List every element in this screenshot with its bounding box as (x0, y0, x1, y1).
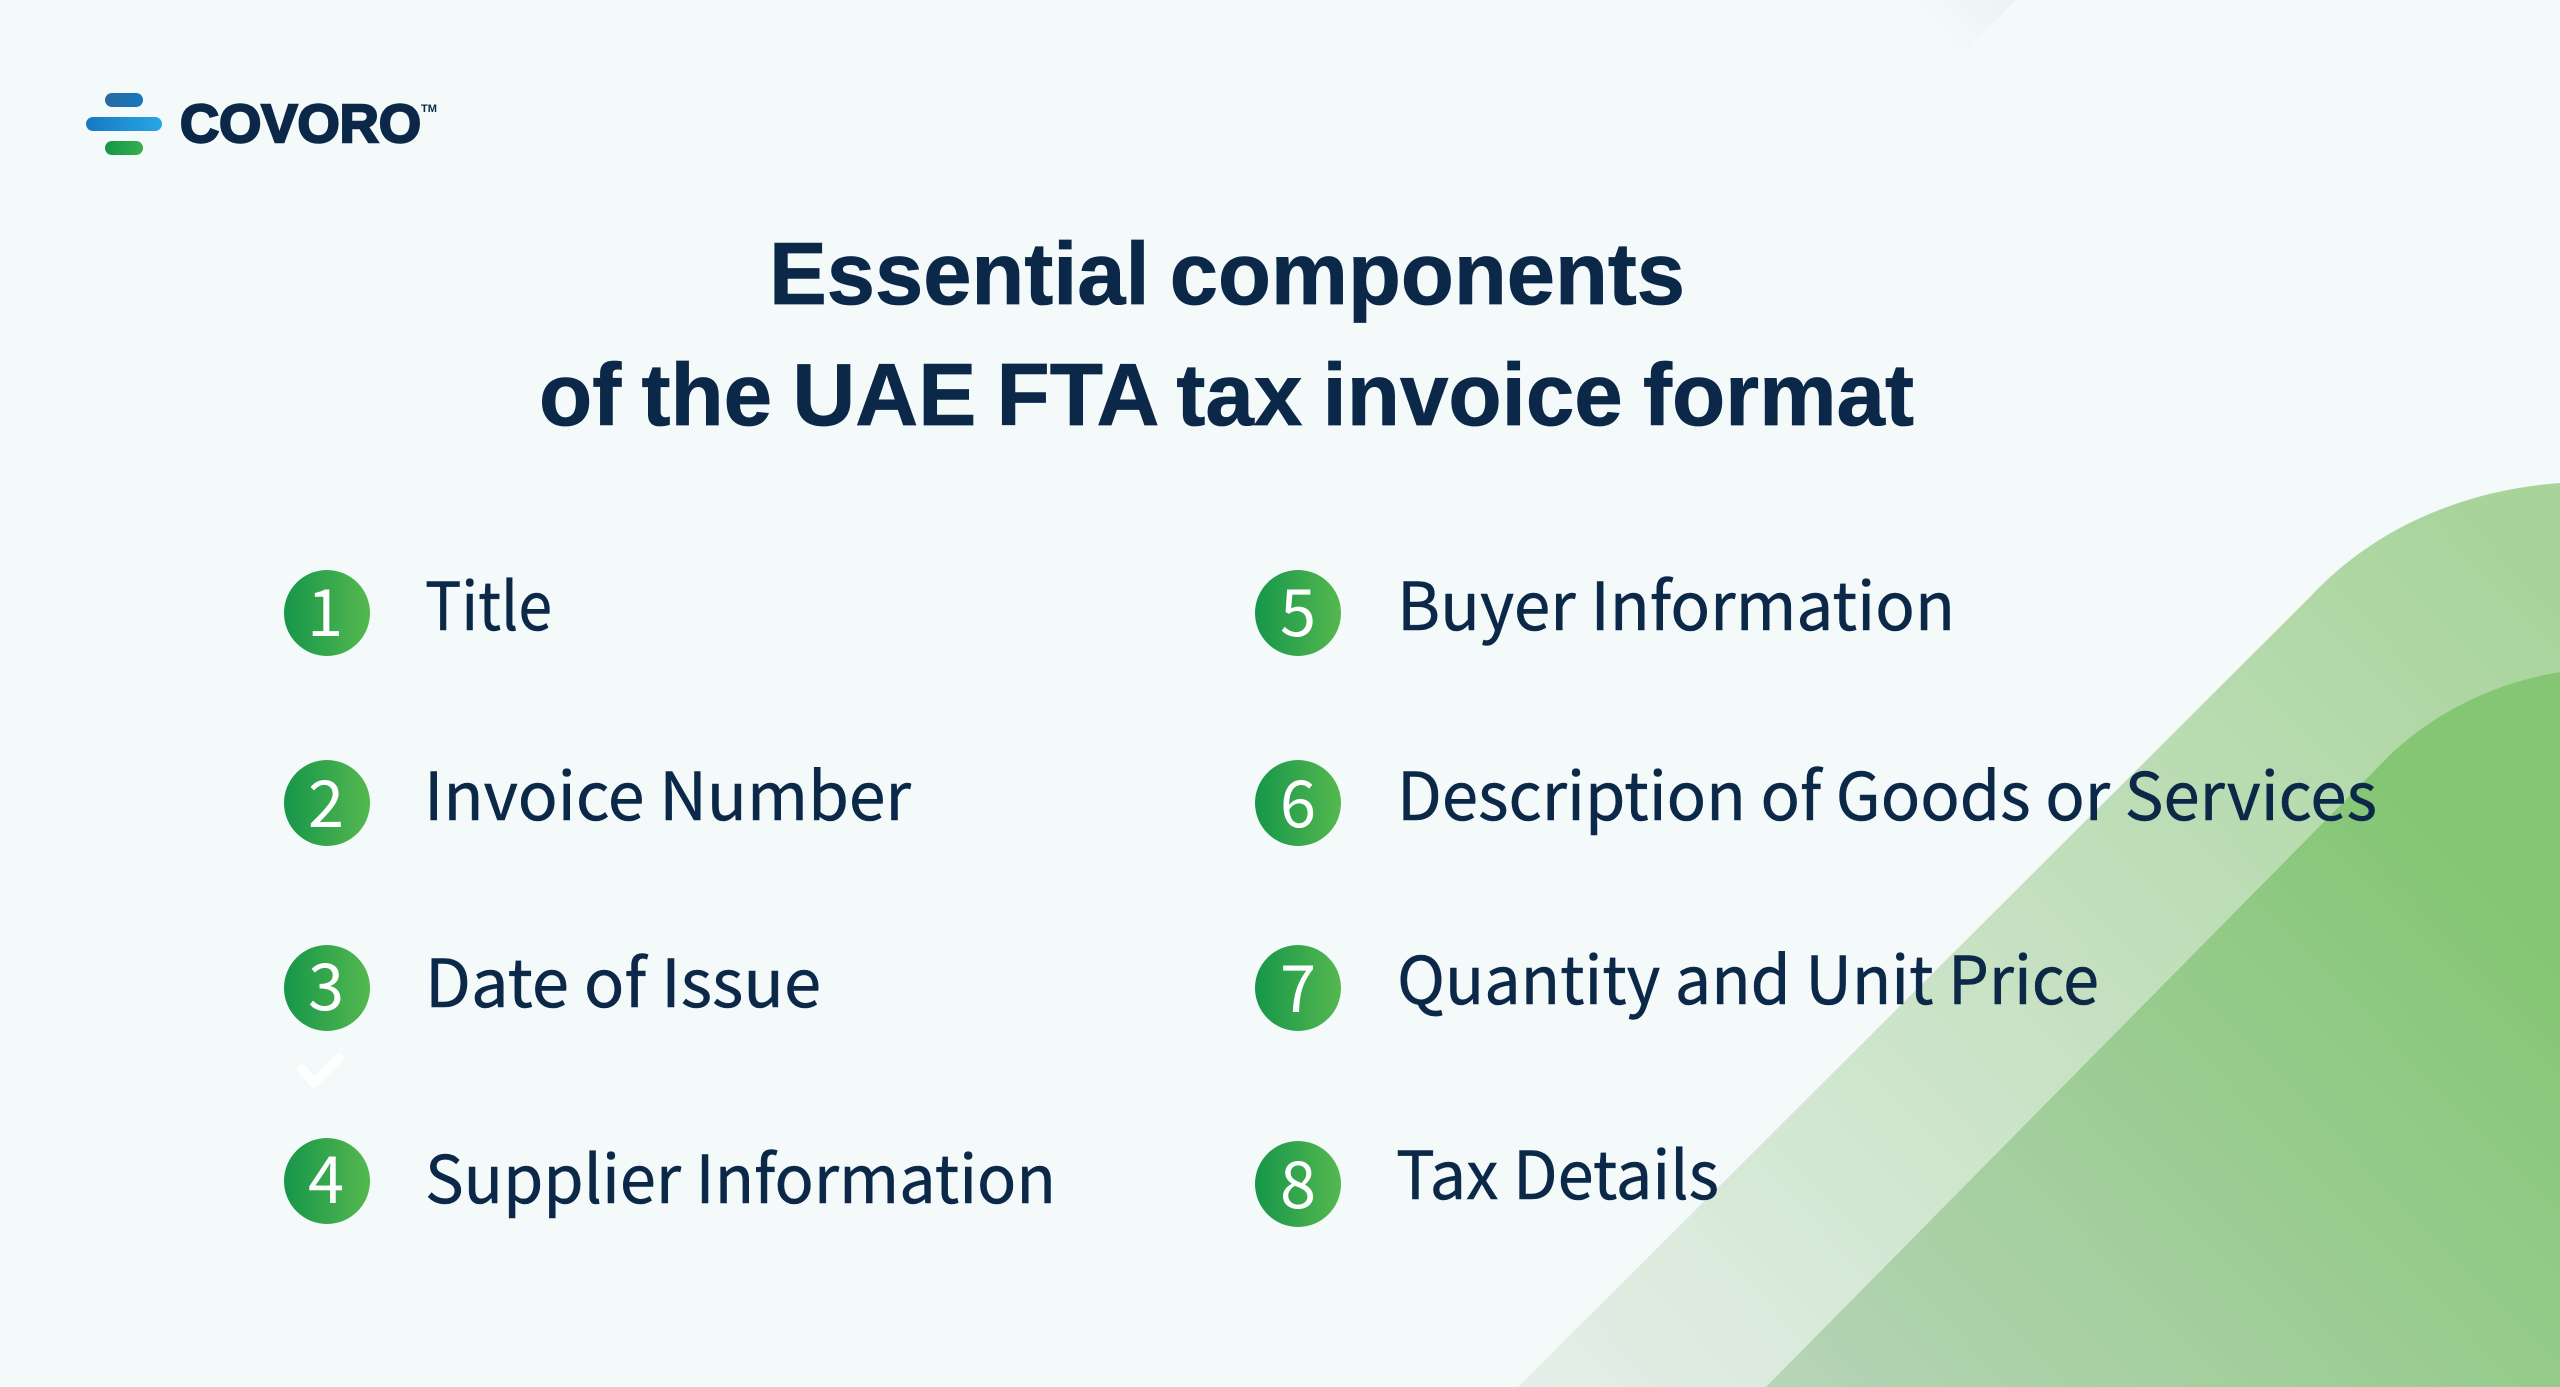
item 2: Invoice Number: 2 (308, 752, 344, 846)
item 7: Quantity and Unit Price: Quantity and Unit Price (1397, 928, 2099, 1024)
item 6: Description of Goods or Services: 6 (1280, 752, 1316, 846)
darker green corner shape (1766, 672, 2560, 1387)
list: left column (284, 554, 1056, 1224)
item 3: Date of Issue: 3 (308, 935, 344, 1029)
item 6: Description of Goods or Services: Description of Goods or Services (1397, 744, 2377, 840)
light green corner shape (1518, 483, 2560, 1387)
item 7: Quantity and Unit Price: 7 (1280, 937, 1316, 1031)
faint top shape (1918, 0, 2016, 54)
icon: white checkmark (302, 1058, 339, 1083)
item 3: Date of Issue: Date of Issue (425, 931, 821, 1027)
item 8: Tax Details: 8 (1280, 1133, 1316, 1227)
logo wordmark: COVORO (180, 94, 421, 154)
item 5: Buyer Information: 5 (1280, 561, 1316, 655)
item 4: Supplier Information: 4 (308, 1128, 344, 1222)
item 8: Tax Details (1255, 1123, 1719, 1227)
item 8: Tax Details: Tax Details (1396, 1123, 1719, 1219)
title: Essential components (769, 224, 1685, 323)
trademark: TM (421, 103, 437, 115)
item 3: Date of Issue (284, 931, 821, 1031)
item 1: Title: Title (425, 554, 552, 650)
logo: Covoro (86, 93, 437, 155)
title (539, 224, 1914, 444)
item 2: Invoice Number: Invoice Number (424, 744, 911, 840)
title: of the UAE FTA tax invoice format (539, 345, 1914, 444)
item 5: Buyer Information: Buyer Information (1397, 554, 1955, 650)
logo icon bars (86, 93, 162, 155)
item 1: Title (284, 554, 552, 656)
item 4: Supplier Information: Supplier Information (425, 1127, 1056, 1223)
item 1: Title: 1 (307, 561, 343, 655)
list: right column (1255, 554, 2377, 1227)
